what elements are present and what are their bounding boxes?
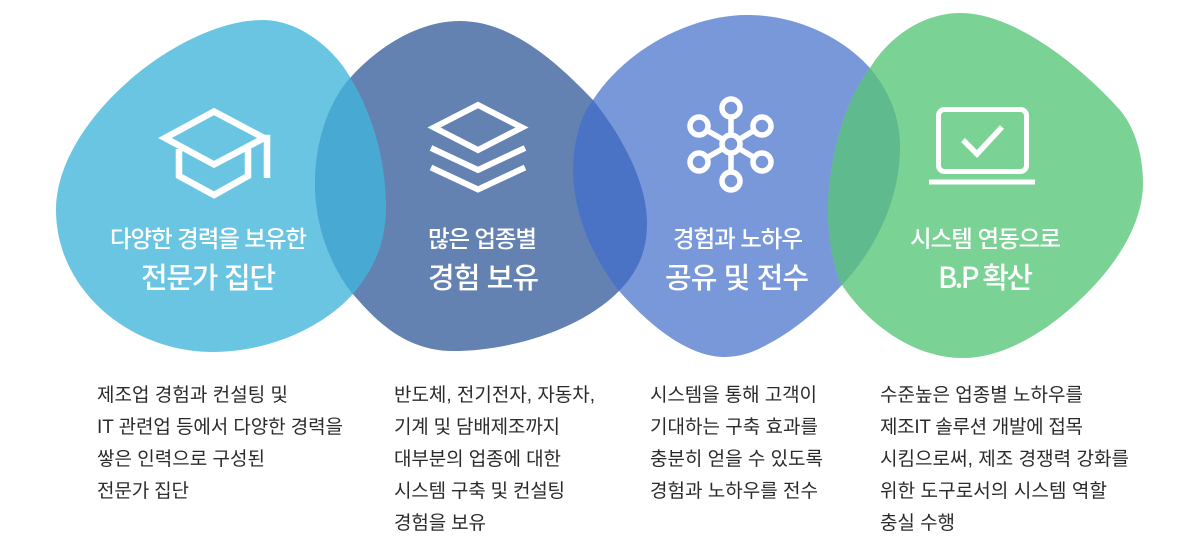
text block: column 3: 기대하는 구축 효과를 bbox=[650, 416, 818, 438]
icon: layers bbox=[431, 105, 525, 190]
heading: column 4 bbox=[910, 220, 1061, 297]
text block: column 1: IT 관련업 등에서 다양한 경력을 bbox=[97, 416, 343, 438]
heading: column 1: 다양한 경력을 보유한 bbox=[110, 220, 307, 254]
text block: column 3: 시스템을 통해 고객이 bbox=[650, 384, 817, 406]
text block: column 1: 쌓은 인력으로 구성된 bbox=[97, 448, 265, 470]
icon: network nodes bbox=[690, 99, 771, 190]
heading: column 1 bbox=[110, 220, 307, 297]
text block: column 4: 위한 도구로서의 시스템 역할 bbox=[880, 480, 1107, 502]
text block: column 2: 반도체, 전기전자, 자동차, bbox=[394, 384, 595, 406]
overlap: light blue and slate bbox=[315, 78, 386, 294]
heading: column 2: 많은 업종별 bbox=[428, 220, 537, 254]
heading: column 3: 공유 및 전수 bbox=[665, 255, 809, 297]
text block: column 1 bbox=[97, 384, 343, 502]
heading: column 3 bbox=[665, 220, 809, 297]
text block: column 2 bbox=[394, 384, 595, 534]
text block: column 1: 제조업 경험과 컨설팅 및 bbox=[97, 384, 288, 406]
text block: column 3: 충분히 얻을 수 있도록 bbox=[650, 448, 823, 470]
blob: periwinkle blue bbox=[573, 15, 900, 357]
heading: column 3: 경험과 노하우 bbox=[673, 220, 803, 254]
text block: column 3: 경험과 노하우를 전수 bbox=[650, 480, 818, 502]
text block: column 4: 시킴으로써, 제조 경쟁력 강화를 bbox=[880, 448, 1129, 470]
heading: column 4: 시스템 연동으로 bbox=[910, 220, 1061, 254]
heading: column 2 bbox=[428, 220, 539, 297]
text block: column 2: 기계 및 담배제조까지 bbox=[394, 416, 560, 438]
blob: green bbox=[828, 13, 1143, 358]
heading: column 1: 전문가 집단 bbox=[141, 255, 276, 297]
overlap: periwinkle and green bbox=[828, 68, 900, 285]
blob: slate blue bbox=[315, 21, 647, 351]
icon: graduation cap bbox=[165, 112, 267, 195]
text block: column 4: 제조IT 솔루션 개발에 접목 bbox=[880, 416, 1083, 438]
heading: column 2: 경험 보유 bbox=[428, 255, 539, 297]
text block: column 4 bbox=[880, 384, 1129, 534]
icon: laptop with check bbox=[929, 110, 1035, 182]
text block: column 2: 시스템 구축 및 컨설팅 bbox=[394, 480, 565, 502]
text block: column 1: 전문가 집단 bbox=[97, 480, 189, 502]
text block: column 2: 대부분의 업종에 대한 bbox=[394, 448, 561, 470]
heading: column 4: B.P 확산 bbox=[938, 255, 1033, 297]
blob: light blue bbox=[56, 20, 386, 352]
text block: column 3 bbox=[650, 384, 823, 502]
text block: column 4: 충실 수행 bbox=[880, 512, 955, 534]
text block: column 2: 경험을 보유 bbox=[394, 512, 486, 534]
text block: column 4: 수준높은 업종별 노하우를 bbox=[880, 384, 1083, 406]
overlap: slate and periwinkle bbox=[573, 100, 647, 291]
